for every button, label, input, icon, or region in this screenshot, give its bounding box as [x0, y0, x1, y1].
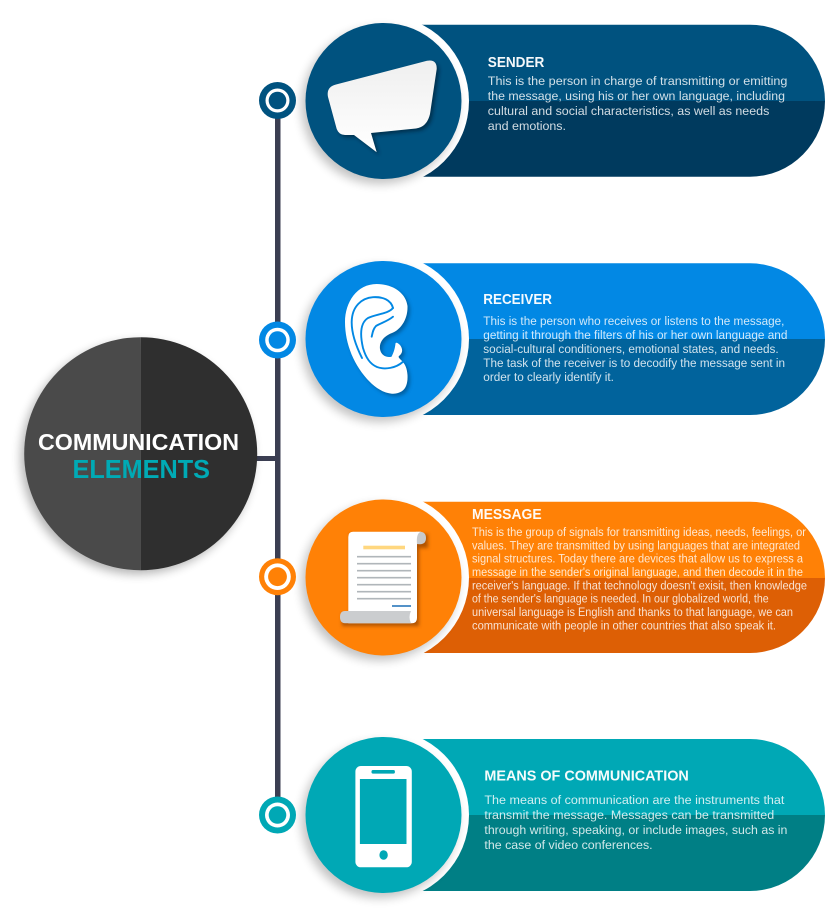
- means pill: [400, 739, 825, 891]
- sender text: SENDER: [488, 55, 545, 71]
- means text: MEANS OF COMMUNICATION: [484, 769, 689, 785]
- means circle: [298, 730, 469, 900]
- receiver text: [483, 292, 787, 384]
- sender pill: [400, 25, 825, 177]
- timeline node: sender: [259, 82, 296, 119]
- receiver text: This is the person who receives or listens to the message,: [483, 314, 784, 328]
- message text: message in the sender's original language, and then decode it in the: [472, 565, 803, 579]
- message text: MESSAGE: [472, 507, 542, 523]
- receiver text: order to clearly identify it.: [483, 370, 614, 384]
- means text: the case of video conferences.: [484, 838, 653, 852]
- message circle: [298, 492, 469, 663]
- sender text: This is the person in charge of transmitting or emitting: [488, 74, 787, 88]
- sender text: and emotions.: [488, 119, 566, 133]
- timeline node: message: [259, 558, 296, 595]
- panel: receiver: [298, 254, 825, 424]
- panel: message: [298, 492, 825, 663]
- receiver text: social-cultural conditioners, emotional states, and needs.: [483, 342, 779, 356]
- receiver circle: [298, 254, 469, 424]
- timeline node: receiver: [259, 322, 296, 358]
- icon: ear: [345, 284, 410, 396]
- means text: The means of communication are the instruments that: [484, 793, 785, 807]
- means text: transmit the message. Messages can be transmitted: [484, 808, 774, 822]
- timeline connector: [250, 101, 280, 815]
- message text: values. They are transmitted by using languages that are integrated: [472, 538, 800, 552]
- message pill: [400, 502, 825, 653]
- panel: sender: [298, 16, 825, 186]
- message text: This is the group of signals for transmitting ideas, needs, feelings, or: [472, 525, 806, 539]
- message text: universal language is English and thanks to that language, we can: [472, 605, 793, 619]
- message text: receiver's language. If that technology doesn't exisit, then knowledge: [472, 578, 807, 592]
- title: COMMUNICATION: [38, 429, 239, 455]
- icon: smartphone: [355, 766, 412, 867]
- icon: speech bubble: [328, 61, 439, 155]
- title: ELEMENTS: [72, 456, 210, 484]
- message text: of the sender's language is needed. In our globalized world, the: [472, 592, 769, 606]
- receiver text: RECEIVER: [483, 292, 552, 308]
- message text: signal structures. Today there are devices that allow us to express a: [472, 552, 803, 566]
- panel: means of communication: [298, 730, 825, 900]
- timeline node: means: [259, 796, 296, 834]
- message text: communicate with people in other countries that also speak it.: [472, 618, 776, 632]
- sender circle: [298, 16, 469, 186]
- central circle: communication elements: [21, 337, 257, 574]
- title: [38, 429, 239, 484]
- receiver text: The task of the receiver is to decodify the message sent in: [483, 356, 785, 370]
- sender text: the message, using his or her own language, including: [488, 89, 785, 103]
- sender text: cultural and social characteristics, as well as needs: [488, 104, 769, 118]
- message text: [472, 507, 807, 632]
- means text: through writing, speaking, or include images, such as in: [484, 823, 787, 837]
- icon: scroll document: [340, 532, 428, 626]
- means text: [484, 769, 787, 852]
- sender text: [488, 55, 787, 133]
- receiver pill: [400, 263, 825, 415]
- receiver text: getting it through the filters of his or her own language and: [483, 328, 787, 342]
